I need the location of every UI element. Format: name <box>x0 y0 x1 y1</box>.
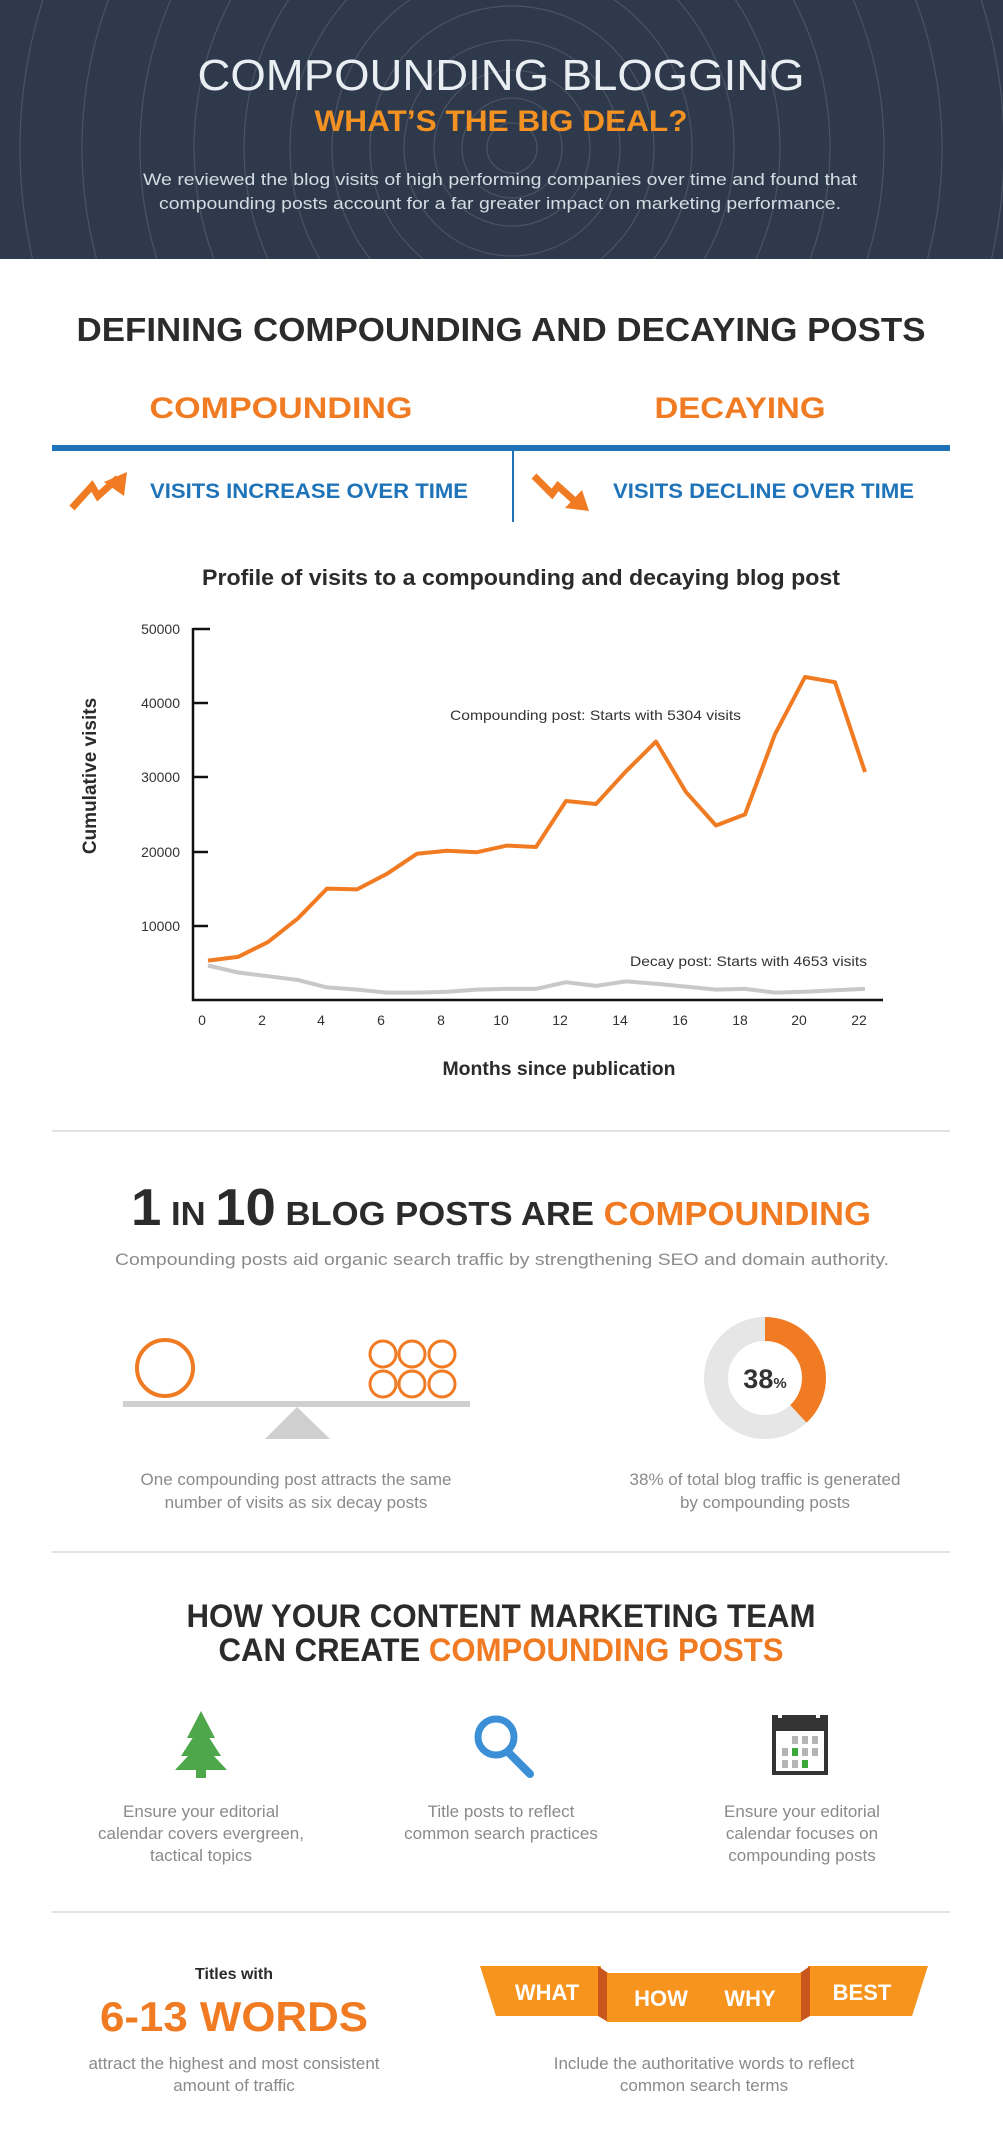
x tick labels: 16 <box>672 1012 688 1028</box>
x tick labels: 22 <box>851 1012 867 1028</box>
annotation: compounding: Compounding post: Starts with 5304 visits <box>450 707 741 723</box>
title: COMPOUNDING BLOGGING <box>198 51 804 100</box>
intro text <box>143 170 857 213</box>
x tick labels: 20 <box>791 1012 807 1028</box>
text: tip 1: calendar covers evergreen, <box>98 1824 304 1843</box>
chart title: Profile of visits to a compounding and decaying blog post <box>202 565 841 590</box>
intro text: compounding posts account for a far greater impact on marketing performance. <box>159 194 841 213</box>
seesaw graphic <box>123 1340 470 1439</box>
text: ribbon caption <box>554 2054 855 2095</box>
text: ribbon caption: Include the authoritative words to reflect <box>554 2054 855 2073</box>
text: ribbon caption: common search terms <box>620 2076 788 2095</box>
intro text: We reviewed the blog visits of high performing companies over time and found that <box>143 170 857 189</box>
text: visits decline: VISITS DECLINE OVER TIME <box>613 480 914 503</box>
ribbon banner: keywords: BEST <box>833 1980 892 2005</box>
x tick labels: 10 <box>493 1012 509 1028</box>
y tick labels: 20000 <box>141 844 180 860</box>
subtitle: WHAT’S THE BIG DEAL? <box>314 105 688 138</box>
text: tip 3: compounding posts <box>728 1846 876 1865</box>
text: tip 3 <box>724 1802 880 1865</box>
subheading: Compounding posts aid organic search traffic by strengthening SEO and domain authority. <box>115 1250 889 1269</box>
x tick labels: 8 <box>437 1012 445 1028</box>
label: compounding: COMPOUNDING <box>150 392 412 425</box>
x axis label: Months since publication <box>442 1059 676 1080</box>
y tick labels: 30000 <box>141 769 180 785</box>
x tick labels: 18 <box>732 1012 748 1028</box>
ribbon banner: keywords: WHAT <box>515 1980 580 2005</box>
heading: defining: DEFINING COMPOUNDING AND DECAYING POSTS <box>76 311 925 348</box>
ribbon banner: keywords: WHY <box>724 1986 776 2011</box>
label: decaying: DECAYING <box>654 392 826 425</box>
x tick labels: 6 <box>377 1012 385 1028</box>
text: seesaw caption <box>141 1470 451 1512</box>
comparison table <box>52 392 950 522</box>
text: seesaw caption: number of visits as six decay posts <box>165 1493 427 1512</box>
text: seesaw caption: One compounding post attracts the same <box>141 1470 451 1489</box>
text: visits increase: VISITS INCREASE OVER TIME <box>150 480 468 503</box>
text: tip 2: Title posts to reflect <box>428 1802 575 1821</box>
ribbon banner: keywords: HOW <box>634 1986 688 2011</box>
text: tip 1: tactical topics <box>150 1846 252 1865</box>
header banner <box>0 0 1003 259</box>
icon: up arrow <box>72 472 127 508</box>
text: tip 2: common search practices <box>404 1824 598 1843</box>
x tick labels: 0 <box>198 1012 206 1028</box>
text: tip 3: Ensure your editorial <box>724 1802 880 1821</box>
text: donut caption: by compounding posts <box>680 1493 850 1512</box>
x tick labels: 2 <box>258 1012 266 1028</box>
annotation: decay: Decay post: Starts with 4653 visits <box>630 953 867 969</box>
compounding line <box>208 677 865 961</box>
icon: calendar <box>772 1712 828 1775</box>
x tick labels: 4 <box>317 1012 325 1028</box>
decay line <box>208 966 865 993</box>
stat: titles with 6-13 words: Titles with <box>195 1966 273 1983</box>
stat: titles with 6-13 words: amount of traffic <box>173 2076 295 2095</box>
heading: how your team: CAN CREATE COMPOUNDING POSTS <box>218 1632 784 1668</box>
donut chart 38% <box>716 1329 814 1427</box>
y tick labels: 10000 <box>141 918 180 934</box>
text: donut caption <box>630 1470 900 1512</box>
stat: titles with 6-13 words: 6-13 WORDS <box>100 1993 368 2040</box>
ribbon banner: keywords <box>480 1966 928 2022</box>
text: tip 3: calendar focuses on <box>726 1824 878 1843</box>
x tick labels <box>198 1012 867 1028</box>
y tick labels: 40000 <box>141 695 180 711</box>
icon: down arrow <box>534 476 589 511</box>
stat: titles with 6-13 words <box>88 1966 380 2095</box>
y tick labels: 50000 <box>141 621 180 637</box>
text: tip 1: Ensure your editorial <box>123 1802 279 1821</box>
heading: 1 in 10: 1 IN 10 BLOG POSTS ARE COMPOUNDING <box>131 1179 871 1237</box>
x tick labels: 14 <box>612 1012 628 1028</box>
axes <box>193 628 883 1000</box>
heading: how your team <box>186 1598 816 1668</box>
x tick labels: 12 <box>552 1012 568 1028</box>
stat: titles with 6-13 words: attract the highest and most consistent <box>88 2054 380 2073</box>
y tick labels <box>141 621 180 934</box>
icon: tree <box>175 1711 227 1778</box>
heading: how your team: HOW YOUR CONTENT MARKETING TEAM <box>186 1598 816 1634</box>
text: tip 1 <box>98 1802 304 1865</box>
icon: magnifier <box>478 1719 530 1774</box>
text: tip 2 <box>404 1802 598 1843</box>
line chart <box>80 565 883 1080</box>
text: donut caption: 38% of total blog traffic is generated <box>630 1470 900 1489</box>
donut chart 38%: 38% <box>743 1364 787 1394</box>
y axis label: Cumulative visits <box>80 698 101 854</box>
